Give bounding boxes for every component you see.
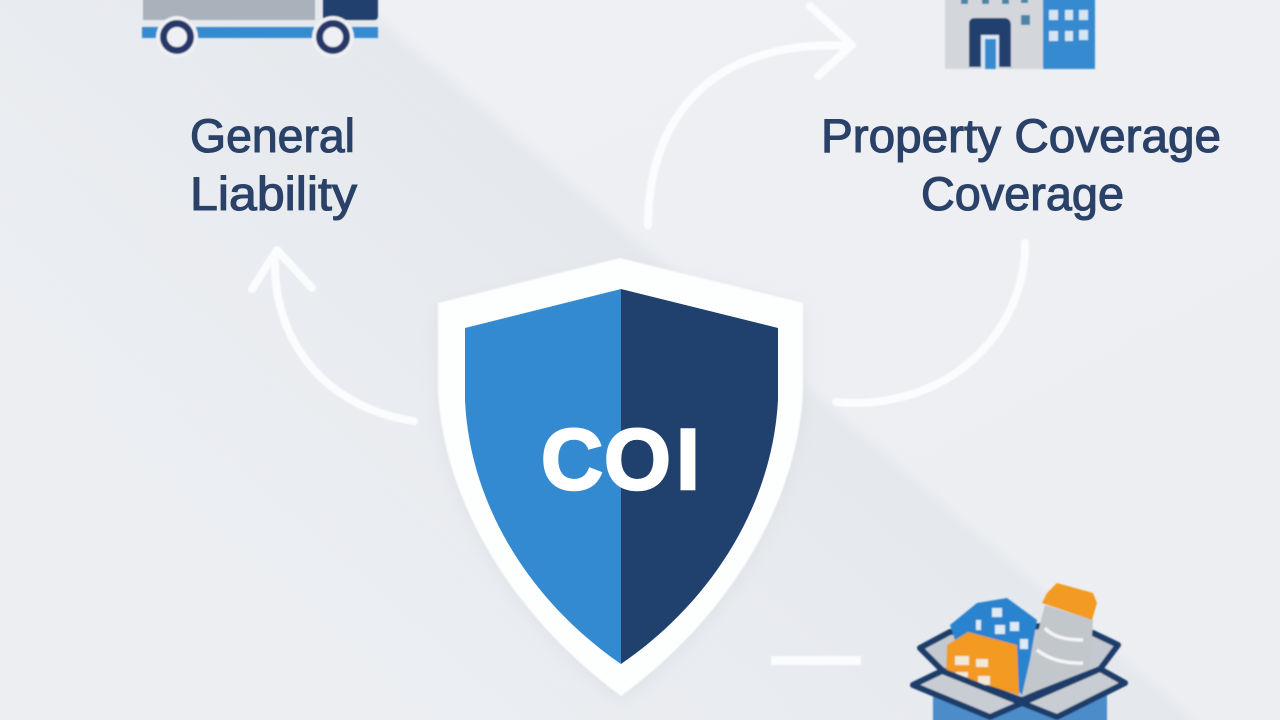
heading: property coverage [821, 109, 1221, 220]
heading: property coverage: Property Coverage [821, 109, 1221, 162]
shield shadow [438, 264, 803, 700]
arrow: from property coverage to shield [836, 243, 1025, 403]
shield right half [621, 289, 778, 664]
building door [969, 18, 1011, 67]
shield left half [465, 289, 621, 664]
icon: building [945, 0, 1095, 69]
heading: general liability: General [190, 109, 355, 162]
truck cargo box [143, 0, 315, 20]
shield white border [438, 258, 803, 696]
truck wheel right [312, 16, 354, 58]
truck cab [323, 0, 378, 20]
icon: open box [913, 583, 1125, 720]
connector dash to box [771, 656, 861, 665]
heading: general liability [190, 109, 358, 220]
box back flaps [920, 625, 1118, 700]
heading: property coverage: Coverage [921, 167, 1124, 220]
box body [933, 695, 1107, 720]
blue cargo [950, 598, 1037, 695]
arrow: to property coverage [648, 6, 852, 225]
orange cargo lid [1042, 583, 1097, 620]
shield label: COI [541, 412, 700, 508]
box front flap right [1022, 669, 1125, 717]
heading: general liability: Liability [190, 167, 358, 220]
shield [438, 258, 803, 700]
arrow: to general liability [252, 250, 414, 421]
building grey wing [945, 0, 1044, 69]
truck chassis [142, 27, 378, 38]
truck wheel left [156, 16, 198, 58]
grey cargo cylinder [1022, 605, 1093, 697]
box front flap left [913, 671, 1022, 717]
icon: truck [142, 0, 378, 58]
orange cargo block [946, 632, 1019, 695]
building windows [1049, 10, 1088, 41]
building blue wing [1043, 0, 1095, 69]
